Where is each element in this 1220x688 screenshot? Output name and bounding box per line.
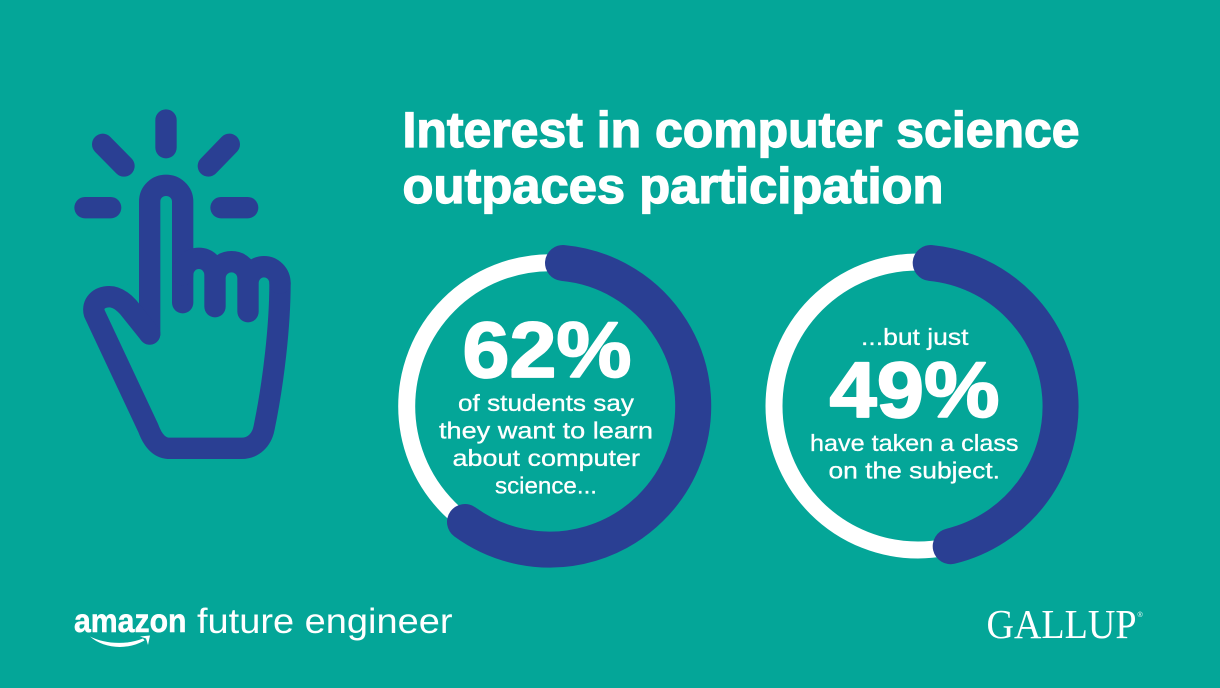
icon: curled fingers [183, 258, 280, 312]
lead-in text: ...but just [861, 324, 969, 350]
description: they want to learn [439, 417, 653, 443]
title: outpaces participation [402, 158, 944, 214]
donut value arc [465, 263, 693, 550]
logo: amazon future engineer [74, 602, 453, 647]
description: on the subject. [828, 458, 1000, 484]
icon: amazon smile [90, 636, 150, 647]
icon: index finger [150, 185, 183, 334]
donut value arc [931, 263, 1061, 546]
donut track [407, 263, 694, 550]
panel: 49 percent donut [774, 262, 1062, 550]
logo: amazon future engineer: future engineer [197, 602, 453, 641]
description: of students say [458, 390, 634, 416]
icon: hand pointer with click rays [85, 120, 280, 448]
logo: Gallup: GALLUP [986, 601, 1136, 647]
donut track [774, 262, 1062, 550]
description: have taken a class [810, 430, 1018, 456]
stat: 62%: 62% [462, 305, 632, 394]
icon: thumb and palm [94, 283, 280, 448]
stat: 49%: 49% [830, 345, 1000, 434]
description [810, 430, 1018, 484]
logo: Gallup: ® [1138, 611, 1144, 619]
description: about computer [452, 445, 640, 471]
panel: 62 percent donut [407, 263, 694, 550]
description [439, 390, 653, 499]
title: Interest in computer science [402, 102, 1080, 158]
icon: click rays [85, 120, 248, 208]
logo: amazon future engineer: amazon [74, 603, 186, 640]
title [402, 102, 1080, 214]
description: science... [495, 473, 597, 499]
